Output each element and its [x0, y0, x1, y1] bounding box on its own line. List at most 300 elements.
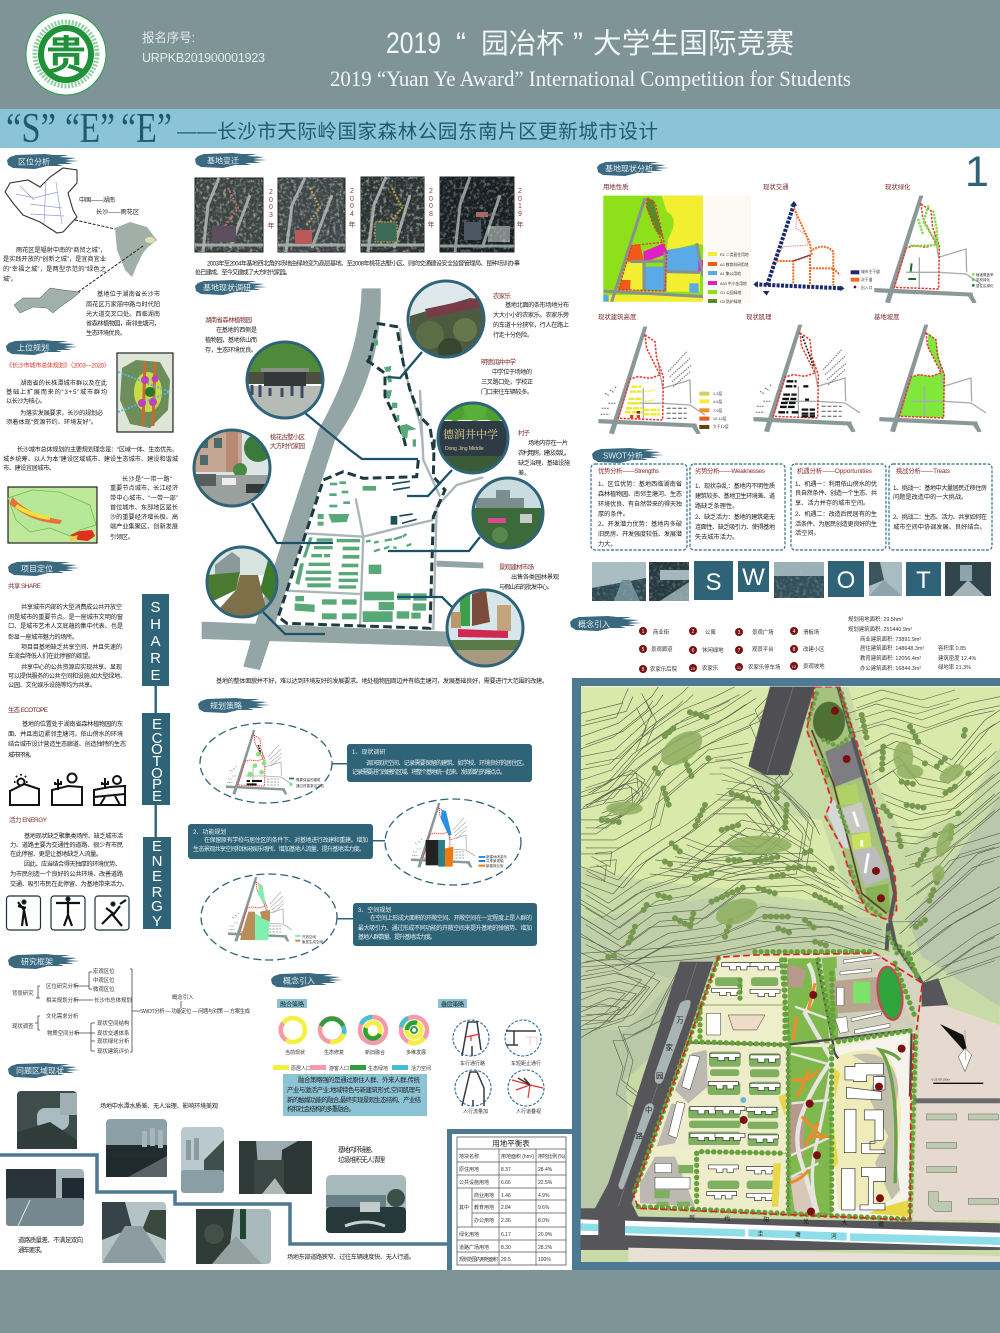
swot box strengths: 力大。: [598, 540, 617, 548]
layered labels: [460, 1060, 541, 1115]
diagram 3: 开放空间: [302, 934, 316, 939]
map: yuhua district: [14, 288, 80, 313]
text: ecotope: 结合城市设计营造生态廊道、创造独特的生态: [8, 740, 126, 748]
statistics: 规划用地面积: 29.5hm²: [848, 615, 903, 623]
chart: building height: 1-3层: [713, 391, 722, 396]
plan legend: 10: [691, 666, 696, 671]
text: village: [518, 428, 570, 477]
flowchart: 宏观区位: [93, 967, 115, 975]
text: middle school: 门口来往车辆较多。: [481, 388, 533, 396]
plan legend: 公寓: [705, 628, 716, 636]
road labels: 家: [666, 1043, 674, 1052]
photo: middle school: [436, 399, 511, 476]
strategy box 3: 最大吸引力、通过形成不同功能的开敞空间来提升基地的弹留势、增加: [358, 924, 532, 932]
text: botanical garden: 植物园，基地依山而: [205, 336, 257, 344]
photo: village: [472, 478, 544, 548]
share ecotope energy column: S: [150, 599, 161, 616]
footer band: [0, 1270, 1000, 1333]
swot box strengths: 森林植物园、南邻圭塘河、生态: [598, 490, 682, 498]
text: ecotope: 城市环境。: [8, 751, 35, 759]
heading: research framework: [8, 954, 80, 969]
text: energy: 在此停留、更是让基地缺乏人流量。: [10, 850, 102, 858]
swot box opportunities: [791, 464, 886, 550]
text: farmhouse: 行走十分危险。: [493, 331, 533, 339]
table: land use balance: 用地平衡表: [492, 1138, 530, 1148]
donut legend: 生态绿地: [368, 1065, 388, 1072]
statistics: [848, 615, 977, 672]
text: ecotope: 生态 ECOTOPE: [8, 705, 48, 714]
years: 0: [269, 197, 273, 204]
donut legend: 活力空间: [411, 1065, 431, 1072]
text: ecotope: 面、并且南边紧邻圭塘河。依山傍水的环境: [8, 730, 123, 738]
swot box threats: 2、挑战二：生态、活力、共享如何在: [893, 513, 987, 521]
heading: project positioning: 项目定位: [21, 564, 53, 574]
text: location paragraph 2: 基地位于湖南省长沙市: [97, 290, 160, 298]
panel: plan legend and statistics: [570, 615, 977, 673]
text: botanical garden: 湖南省森林植物园: [205, 315, 252, 324]
text: road quality: 道路质量差、不满足双向: [18, 1235, 83, 1244]
east block: [772, 1033, 910, 1220]
layered labels: 车短距止通行: [511, 1060, 541, 1067]
years: 0: [350, 196, 354, 203]
chart: traffic: [753, 201, 859, 296]
aerial image 2008: [361, 177, 424, 252]
flowchart: 微观区位: [93, 985, 115, 993]
swot box weaknesses: 2、缺乏活力：基地的建筑毫无: [695, 513, 775, 521]
chart titles: 现状交通: [763, 182, 789, 191]
swot box weaknesses: 建筑较多、基地卫生环境差、道: [695, 492, 775, 500]
text: share: 口、是城市艺术人文底蕴的集中代表、也是: [8, 622, 123, 630]
main title: 园冶杯: [481, 28, 564, 59]
north strip: [807, 687, 922, 983]
plan legend: 4: [793, 629, 796, 635]
text: ecotope: 基地的位置处于湖南省森林植物园的东: [22, 720, 123, 728]
chart: building height: 10-12层: [713, 416, 727, 421]
text: energy: 因此、应当结合得天独厚的环境优势、: [24, 860, 121, 868]
text: belt and road paragraph: 带中心城市、“一带一部”: [110, 494, 178, 502]
table: land use balance: 道路广场用地: [459, 1244, 489, 1251]
text: location paragraph 1: 的“幸福之城”，是两型示范的“绿色之: [3, 265, 106, 273]
flowchart: 物质空间分析: [47, 1029, 80, 1037]
text: belt and road paragraph: 首位城市、东部地区是长: [110, 504, 178, 512]
text: planning paragraph 1: 湖南省的长株潭城市群以及在此: [20, 379, 107, 387]
photo 4: [239, 1141, 312, 1194]
header band: [0, 0, 1000, 109]
photo: middle school: Dong Jing Middle: [445, 446, 484, 452]
table: land use balance: 28.2%: [538, 1245, 553, 1251]
donut labels: 新旧融合: [365, 1049, 385, 1056]
panel: planning strategy: [188, 698, 537, 960]
strategy box 3: 基地人群数量、提升基地活力度。: [358, 933, 436, 941]
text: location labels: 中国——湖南: [79, 196, 115, 204]
main title: 大学生国际竞赛: [593, 28, 794, 60]
text: share: 车流会降低人们在此停留的欲望。: [8, 652, 94, 660]
fusion paragraph: 新的触媒功能的融合,最终实现景观生态结构、产业结: [287, 1095, 422, 1104]
years: 4: [350, 211, 354, 218]
diagram 2: 新建休闲游乐: [486, 854, 507, 859]
panel: site evolution: [195, 153, 524, 276]
text: belt and road paragraph: 长沙是“一带一路”: [122, 475, 172, 483]
text: middle school: [481, 357, 533, 396]
text: residential: [270, 432, 306, 450]
chart titles: [598, 182, 911, 321]
strategy box 3: 在空间上形成大面积的开敞空间、开敞空间在一定程度上是人群的: [370, 914, 532, 922]
lower site: [580, 707, 1000, 1263]
subtitle band: [0, 106, 1000, 152]
text: middle school: 明德润井中学: [481, 357, 517, 366]
heading: concept introduction: [271, 973, 343, 988]
plan legend: 滑板场: [803, 628, 820, 636]
text: market: 出售各类园林景观: [511, 573, 559, 581]
swot box opportunities: 活空间。: [795, 529, 820, 537]
swot box opportunities: 1、机遇一：利用依山傍水的优: [795, 480, 877, 488]
table: land use balance: 8.30: [501, 1245, 511, 1251]
plan legend: 农家乐停车场: [748, 663, 781, 671]
site base: [634, 953, 922, 1220]
years: 年: [268, 221, 274, 230]
aerial image 2019: [440, 177, 514, 252]
heading: upper-level planning: [6, 340, 78, 355]
share ecotope energy column: G: [151, 898, 163, 915]
years: 2: [429, 188, 433, 195]
plan legend: 7: [738, 648, 741, 654]
years: 0: [350, 203, 354, 210]
strategy box 1: [332, 744, 532, 782]
share ecotope energy column: E: [152, 788, 162, 805]
years: 9: [518, 211, 522, 218]
share ecotope energy column: R: [152, 884, 163, 901]
heading: site survey: 基地现状调研: [203, 282, 251, 292]
panel: location analysis: [3, 154, 160, 337]
years: 1: [518, 203, 522, 210]
photo: middle school: 德润井中学: [443, 426, 498, 442]
heading: problem area: 问题区域现状: [16, 1066, 64, 1076]
table: land use balance: 9.6%: [538, 1205, 550, 1211]
share ecotope energy column: C: [152, 730, 163, 747]
statistics: 规划建筑面积: 251440.9m²: [848, 625, 912, 633]
text: botanical garden: 存，生态环境优良。: [205, 346, 257, 354]
swot box threats: 1、挑战一：基地中大量居民迁移住房: [893, 484, 987, 492]
table: land use balance: 20.9%: [538, 1232, 553, 1238]
plan legend: 农家乐: [702, 664, 719, 672]
road medians: [618, 1000, 691, 1189]
leader lines: [252, 352, 480, 634]
donut legend: 原居人口: [291, 1066, 311, 1072]
text: share: 彰显一座城市魅力的场所。: [8, 633, 78, 641]
text: location paragraph 1: 是实践开放的“创新之城”，是宜商宜业: [3, 255, 106, 263]
share ecotope energy column: E: [152, 716, 162, 733]
text: share: [8, 581, 126, 689]
chart: traffic legend: 次干道: [861, 277, 873, 282]
chart titles: 用地性质: [603, 182, 629, 191]
text: location paragraph 2: 省森林植物园，南邻圭塘河，: [86, 320, 160, 328]
photo 1: [17, 1091, 77, 1149]
swot letters: [694, 561, 941, 600]
text: energy: 基地现状缺乏聚集类场所、缺乏城市活: [24, 832, 123, 840]
layered labels: 人行流量加: [463, 1108, 488, 1115]
flowchart: 背景研究: [12, 989, 34, 997]
panel: research framework: [8, 954, 251, 1055]
diagram 1: [200, 723, 332, 803]
years: 0: [518, 196, 522, 203]
share ecotope energy column: E: [150, 667, 161, 684]
contour lines: [576, 687, 1000, 1107]
heading: concept introduction: 概念引入: [283, 976, 315, 986]
statistics: 办公建筑面积: 16844.3m²: [860, 664, 921, 672]
donut legend: [273, 1065, 431, 1072]
table: land use balance: 办公用地: [474, 1217, 494, 1224]
table: land use balance: 其中: [459, 1204, 469, 1211]
swot box opportunities: 机遇分析——Opportunities: [797, 466, 872, 475]
panel: current site analysis: [597, 148, 994, 434]
table: land use balance: 教育用地: [474, 1204, 494, 1211]
photo 6: [102, 1202, 166, 1263]
chart: land use legend: G1 公园绿地: [720, 290, 742, 295]
diagram 1: 需要保留的建筑: [296, 777, 321, 782]
site plan roads and blocks: [202, 288, 483, 670]
text: farmhouse: [493, 291, 569, 339]
flowchart: 长沙市总体规划: [94, 996, 132, 1004]
donut legend: 游客人口: [329, 1065, 349, 1072]
english title: 2019 “Yuan Ye Award” International Competition for Students: [330, 66, 851, 91]
diagram 2: 新建商业街: [486, 863, 504, 868]
main title: [386, 27, 794, 60]
canal: [580, 1219, 1000, 1247]
chart: greening: [874, 196, 994, 303]
road labels: 阳: [763, 1216, 769, 1224]
chart: land use legend: A33 中小金用地: [720, 281, 747, 286]
text: belt and road paragraph: 引领区。: [110, 533, 134, 541]
text: farmhouse: 农家乐: [493, 291, 512, 300]
text: energy: 力、道路主要为交通性的道路、很少有市民: [10, 841, 123, 849]
swot box weaknesses: 失去城市活力。: [695, 533, 738, 541]
table: land use balance: [457, 1137, 566, 1265]
text: evolution paragraph: 2003年至2004年基地西北角的场地由绿地变为高层基地、至2008年桃花古墅小区、则向交通建设安全监督管理局、昆种培训办事: [207, 260, 520, 268]
text: location paragraph 2: [86, 290, 160, 337]
chart titles: 现状建筑高度: [598, 312, 637, 321]
master plan: [576, 687, 1000, 1263]
text: belt and road paragraph: 沙的重要经济增长极、高: [110, 513, 178, 521]
table: land use balance: 绿化用地: [459, 1231, 479, 1238]
swot letters: T: [916, 567, 931, 594]
chart titles: 现状肌理: [746, 312, 772, 321]
tag: connection strategy: 叠层策略: [441, 1000, 465, 1008]
years: 年: [516, 220, 524, 229]
chart: traffic legend: [861, 269, 880, 290]
chart: traffic legend: 城市主干道: [861, 269, 880, 274]
years: 2: [350, 188, 354, 195]
text: share: 共享 SHARE: [8, 581, 41, 590]
fusion paragraph: 构和社会结构的多重融合。: [287, 1104, 355, 1113]
swot box strengths: 优势分析——Strengths: [598, 466, 659, 475]
photo 3: [181, 1127, 224, 1193]
strategy box 3: [337, 903, 537, 946]
swot box weaknesses: 劣势分析——Weaknesses: [695, 466, 765, 475]
swot box threats: 问题是改造中的一大挑战。: [893, 493, 967, 501]
logo: 贵: [46, 34, 86, 78]
share ecotope energy column: P: [152, 776, 162, 793]
table: land use balance: 8.37: [501, 1167, 511, 1173]
text: survey summary: 基地的整体面貌并不好，难以达到环境友好的发展要求。地处植物园周边并有临圭塘河，发展基础良好，需要进行大范围的改建。: [216, 677, 548, 685]
swot box strengths: 厚的条件。: [598, 510, 629, 518]
table: land use balance: 规划范围内用地面积: [459, 1256, 498, 1263]
text: road quality: [18, 1235, 83, 1254]
text: plan name: 《长沙市城市总体规划》（2003—2020）: [6, 362, 110, 370]
plan legend: 12: [792, 664, 797, 669]
photo: river: [207, 547, 277, 617]
table: land use balance: 29.5: [501, 1257, 511, 1263]
flowchart: 文化需求分析: [46, 1012, 79, 1020]
text: planning paragraph 1: 为落实发展要求，长沙的规划必: [20, 409, 103, 417]
chart: traffic legend: 出入口: [861, 285, 873, 290]
swot box weaknesses: 连面性、缺乏吸引力、使得基地: [695, 523, 775, 531]
text: planning paragraph 1: 基础上扩展而来的“3+5”城市群均: [6, 388, 107, 396]
share ecotope energy column: T: [152, 753, 162, 770]
chart: slope: [879, 325, 986, 432]
road labels: 路: [636, 1131, 644, 1140]
map: china: [5, 168, 77, 233]
canal label: 圭: [758, 1229, 764, 1237]
text: planning paragraph 2: 市、建设宜居城市。: [3, 464, 55, 472]
chart: greening: 植被覆盖率: [976, 272, 994, 277]
plan legend: 5: [642, 647, 645, 653]
divider frame: [0, 1131, 574, 1244]
heading: current site analysis: 基地现状分析: [605, 164, 653, 174]
text: environment: 垃圾堆积无人清理: [338, 1155, 385, 1164]
diagram 1: 通过改善激活力点: [296, 783, 324, 788]
share ecotope energy column: R: [150, 650, 161, 667]
table: land use balance: 商业用地: [474, 1192, 494, 1199]
text: botanical garden: 在基地的西侧是: [216, 326, 257, 334]
table: land use balance: 6.66: [501, 1180, 511, 1186]
logo: [26, 13, 106, 95]
photo: botanical garden: [245, 340, 325, 420]
aerial image 2003: [195, 178, 263, 252]
panel: concept introduction: [271, 973, 544, 1116]
strategy box 1: 记录需要进行改建的区域、将整个基地统一起来、发现潜在的爆点点。: [352, 768, 506, 776]
flowchart: [12, 967, 251, 1055]
photo 8: [326, 1175, 406, 1233]
chart: building height: 4-6层: [713, 399, 722, 404]
text: belt and road paragraph: 端产业集聚区、创新发展: [110, 522, 178, 530]
aerial image 2004: [278, 178, 345, 252]
heading: upper-level planning: 上位规划: [17, 342, 49, 352]
donut labels: [285, 1049, 426, 1056]
text: planning paragraph 2: 长沙城市总体规划的主要规划理念是：“区域一体、生态优先、: [17, 446, 178, 454]
strategy box 1: 调词现状空间、记录需要保留的建筑、如学校、环境良好的居住区。: [366, 759, 528, 767]
subtitle band: ——长沙市天际岭国家森林公园东南片区更新城市设计: [177, 121, 658, 143]
donut labels: 生态修复: [324, 1049, 344, 1056]
text: village: 差。: [518, 469, 530, 477]
table: land use balance: 用地面积 (hm²): [501, 1153, 534, 1160]
text: share: 公园、文化娱乐设施等均为共享。: [8, 681, 96, 689]
swot box strengths: [591, 464, 687, 550]
plan legend: 农家乐后院: [650, 665, 678, 673]
swot box strengths: 1、区位优势：基地西临湖南省: [598, 480, 682, 488]
years: 0: [429, 196, 433, 203]
statistics: 绿地率 21.3%: [938, 663, 971, 671]
map: belt and road: [8, 487, 97, 543]
plan legend: 6: [692, 648, 695, 654]
share ecotope energy column: H: [150, 616, 161, 633]
plan legend: 9: [642, 667, 645, 673]
donut charts: [281, 1017, 427, 1043]
table: land use balance: 地块名称: [459, 1153, 479, 1160]
school: [818, 955, 922, 1042]
share ecotope energy column: [142, 594, 171, 930]
internal roads: [690, 958, 912, 1215]
text: environment: 基地内环境差、: [338, 1145, 377, 1154]
plan legend: 观景平台: [752, 645, 774, 653]
subtitle band: “E”: [65, 106, 115, 152]
dark wedge road: [748, 687, 815, 775]
registration number: [142, 30, 265, 65]
plan legend: 3: [738, 630, 741, 636]
swot box threats: [889, 464, 992, 550]
text: evolution paragraph: [195, 260, 520, 276]
text: energy: [9, 815, 128, 888]
heading: swot: [592, 448, 664, 463]
panel: upper-level planning: [3, 340, 179, 543]
text: belt and road paragraph: 重要节点城市、长江经济: [110, 484, 179, 492]
panel: site survey map: [194, 278, 570, 685]
chart titles: 基地坡度: [874, 312, 900, 321]
road labels: 代: [724, 1215, 730, 1223]
residential buildings: [690, 963, 780, 1201]
chart: land use legend: A3 教育科研用地: [720, 262, 749, 267]
photo 2: [106, 1119, 167, 1177]
layered labels: 人行道叠视: [516, 1108, 541, 1115]
strategy box 3: 3、空间规划: [358, 906, 391, 914]
text: location paragraph 2: 光大道交叉口处。西临湖南: [86, 310, 160, 318]
plan legend: 1: [642, 629, 645, 635]
tag: connection strategy: [438, 999, 467, 1008]
grey parking zones: [640, 1050, 708, 1207]
text: village: 场地内存在一片: [528, 439, 568, 447]
text: energy: 活力 ENERGY: [9, 815, 48, 824]
road labels: 园: [656, 1071, 663, 1080]
swot box strengths: 2、开发潜力优势：基地内多破: [598, 520, 682, 528]
text: share: 共享中心的公共资源应实现共享、显现: [21, 663, 122, 671]
text: planning paragraph 1: 须着体现“资源节约、环境友好”。: [6, 418, 97, 426]
chart: building height: 大于12层: [713, 424, 729, 429]
swot box opportunities: 良自然条件、创造一个生态、共: [795, 489, 877, 497]
page number: 1: [965, 148, 989, 196]
road labels: 中: [645, 1106, 652, 1115]
text: village: 缺乏治理，基础设施: [518, 459, 570, 467]
plan legend: [639, 627, 825, 673]
text: market: 景观建材市场: [499, 562, 534, 571]
table: land use balance: 2.84: [501, 1205, 511, 1211]
flowchart: 现状绿化分析: [97, 1037, 130, 1045]
heading: concept: 概念引入: [578, 619, 610, 629]
share ecotope energy column: N: [152, 853, 162, 870]
table: land use balance: 28.4%: [538, 1167, 553, 1173]
text: residential: 桃花古墅小区: [270, 432, 306, 441]
diagram 3: [201, 874, 337, 960]
table: land use balance: 6.17: [501, 1232, 511, 1238]
strategy box 2: 2、功能规划: [193, 828, 226, 836]
years: 年: [428, 220, 434, 229]
swot box opportunities: 2、机遇二：改造后民居有的生: [795, 510, 877, 518]
icons: ecotope: [10, 774, 125, 805]
plan legend: 景观坡地: [803, 662, 825, 670]
years: 年: [348, 220, 356, 229]
road labels: 光: [803, 1217, 809, 1225]
text: farmhouse: 基地北面的条形场地分布: [505, 301, 569, 309]
swot letters: S: [705, 569, 722, 596]
road labels: 万: [676, 1016, 684, 1025]
